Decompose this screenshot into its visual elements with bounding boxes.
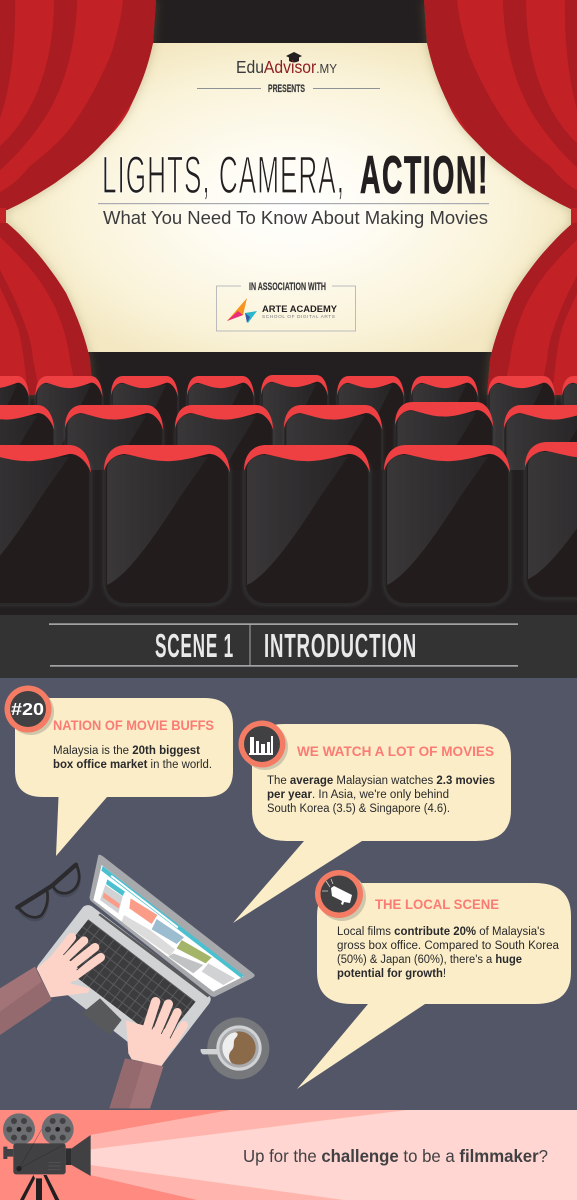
association label: IN ASSOCIATION WITH [249,281,326,293]
cinema screen [0,43,577,352]
right arm [109,1058,163,1108]
speech bubble: nation of movie buffs [4,686,233,856]
body text: box office market in the world. [53,759,212,771]
partner box: Arte Academy [216,281,356,331]
partner box: Arte Academy: SCHOOL OF DIGITAL ARTS [262,314,335,320]
logo wordmark: EduAdvisor.MY [236,57,337,77]
heading: NATION OF MOVIE BUFFS [53,718,214,733]
speech bubble: the local scene [297,870,571,1089]
curtain: left [0,0,160,395]
logo: EduAdvisor.MY [236,52,337,77]
icon: film camera [3,1113,91,1200]
icon: bar chart badge [238,720,288,770]
body text [53,745,212,771]
icon: graduation cap [286,52,302,62]
curtain: right [420,0,577,395]
body text: per year. In Asia, we're only behind [267,789,449,801]
body text: Malaysia is the 20th biggest [53,745,200,757]
icon: #20 badge: #20 [11,699,44,719]
section bar: scene 1 [0,615,577,678]
trackpad [82,998,122,1035]
scene heading: INTRODUCTION [264,627,417,664]
footer banner [0,1110,577,1200]
tripod [20,1175,59,1200]
body text: (50%) & Japan (60%), there's a huge [337,954,522,966]
keyboard [66,920,196,1029]
body text [267,775,495,815]
call to action: Up for the challenge to be a filmmaker? [243,1146,548,1166]
projector beam [90,1110,577,1200]
body text: Local films contribute 20% of Malaysia's [337,926,545,938]
body text: The average Malaysian watches 2.3 movies [267,775,495,787]
icon: arte academy logo [227,298,257,323]
camera body [13,1143,66,1174]
laptop screen [90,855,255,997]
right hand [126,1002,184,1066]
seats: back row [0,375,577,495]
icon: megaphone badge [315,870,366,921]
partner name: ARTE ACADEMY [262,304,338,315]
seats: front row [0,442,577,604]
icon: glasses [17,865,80,920]
heading: THE LOCAL SCENE [375,897,499,912]
subtitle: What You Need To Know About Making Movies [103,207,488,228]
film reels [3,1113,74,1145]
stage background [0,0,577,616]
coffee cup [201,1017,269,1079]
speech bubble: we watch a lot of movies [233,720,511,923]
desk background [0,678,577,1110]
scene label: SCENE 1 [155,627,234,664]
heading: WE WATCH A LOT OF MOVIES [297,743,494,759]
presents label: PRESENTS [268,83,305,95]
seats: middle row [0,402,577,548]
body text: gross box office. Compared to South Korea [337,940,560,952]
body text: South Korea (3.5) & Singapore (4.6). [267,803,450,815]
left arm [0,967,52,1035]
left hand [37,937,101,997]
body text: potential for growth! [337,968,446,980]
icon: #20 badge [4,686,54,735]
laptop base [37,905,211,1066]
body text [337,926,560,980]
illustration: laptop on desk [0,855,269,1108]
